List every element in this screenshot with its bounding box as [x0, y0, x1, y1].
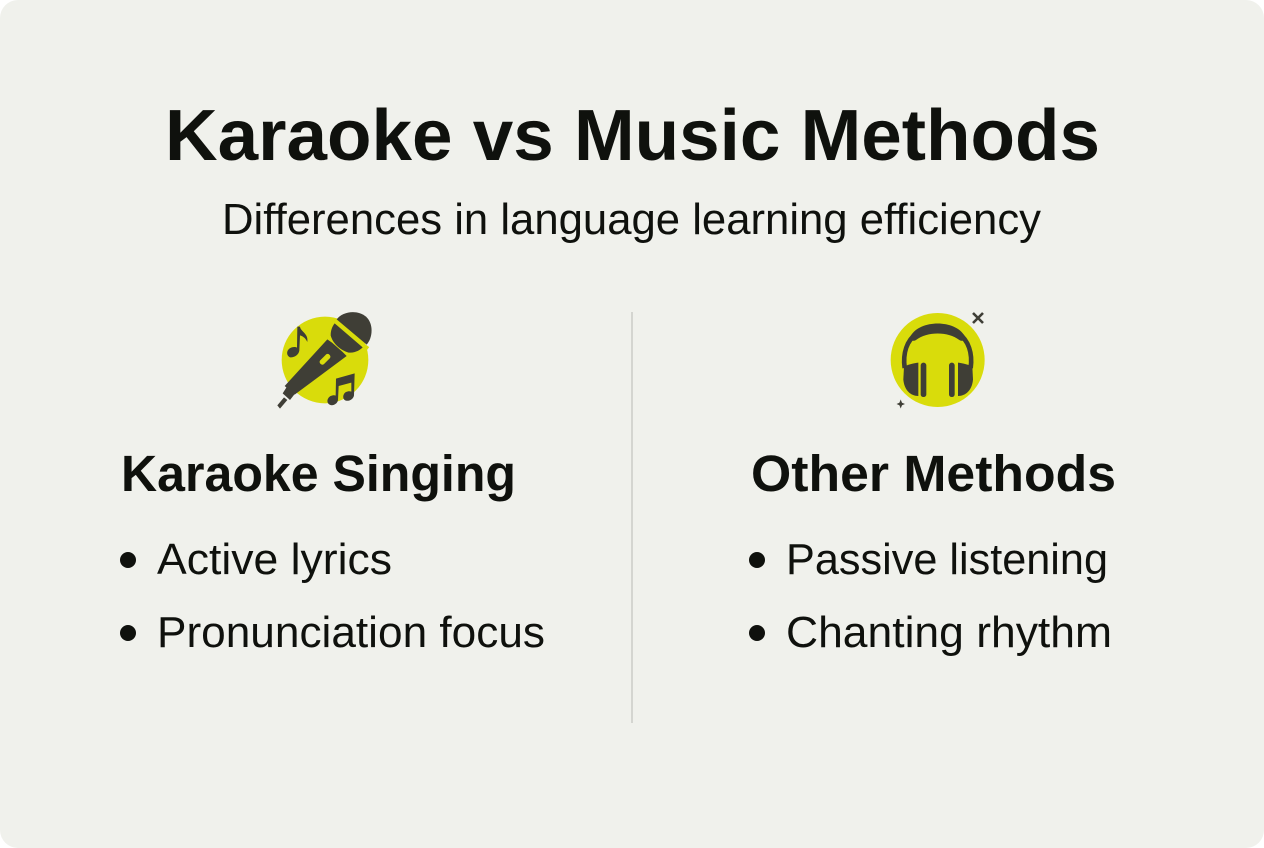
icon: headphones [891, 313, 985, 407]
bullet list: other methods: Chanting rhythm [786, 608, 1112, 657]
bullet list: karaoke [120, 535, 545, 657]
panel: other methods [749, 313, 1116, 657]
heading: other methods: Other Methods [751, 445, 1116, 502]
bullet list: karaoke: Pronunciation focus [157, 608, 545, 657]
icon: single note [287, 327, 307, 357]
icon: cross mark [973, 313, 983, 323]
icon: sparkle [896, 400, 905, 408]
heading: karaoke singing: Karaoke Singing [121, 445, 516, 502]
title: Karaoke vs Music Methods [165, 96, 1100, 176]
bullet list: other methods [749, 535, 1112, 657]
subtitle: Differences in language learning efficiency [222, 195, 1041, 244]
icon: double note [327, 373, 355, 405]
icon: microphone with music notes [277, 312, 372, 409]
bullet list: karaoke: Active lyrics [157, 535, 392, 584]
bullet list: other methods: Passive listening [786, 535, 1108, 584]
panel: karaoke singing [120, 312, 545, 657]
